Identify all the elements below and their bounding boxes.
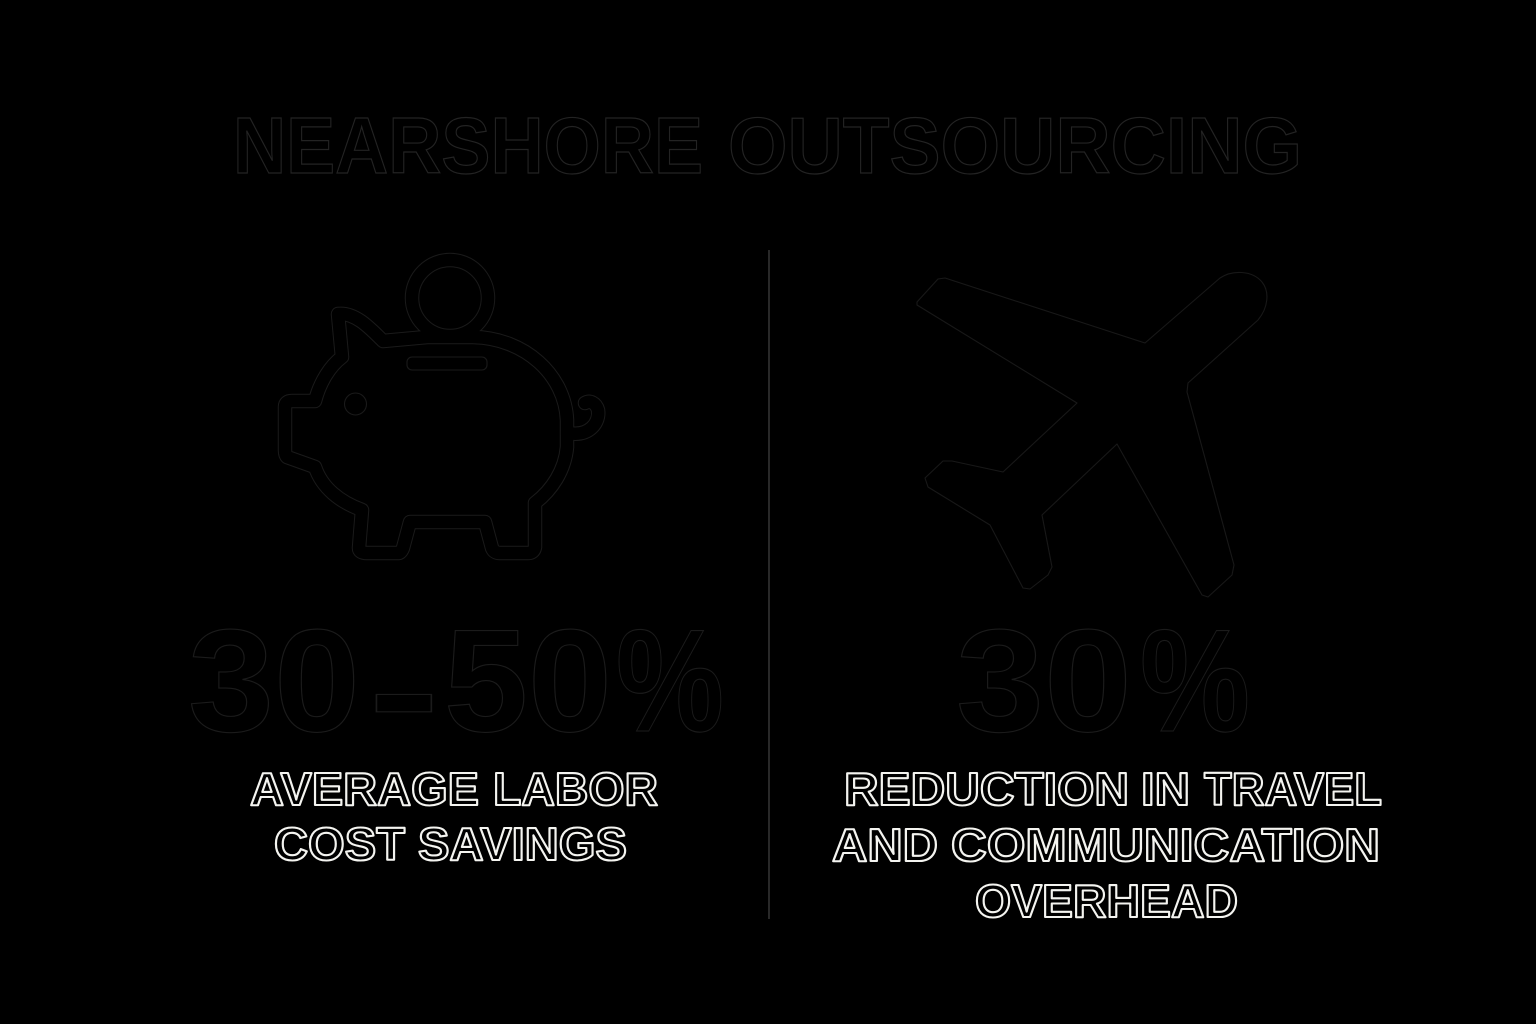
label: reduction in travel and communication overhead: AND: [832, 819, 938, 871]
label: average labor cost savings: SAVINGS: [418, 818, 627, 870]
title: NEARSHORE: [233, 101, 703, 190]
label: average labor cost savings: COST: [274, 818, 405, 870]
stat: 30%: 30: [956, 599, 1132, 762]
stat: 30-50%: %: [616, 599, 724, 762]
panel: labor cost savings: [188, 260, 724, 870]
divider: [768, 250, 770, 919]
stat: 30%: %: [1140, 599, 1250, 762]
label: average labor cost savings: [250, 763, 658, 870]
label: reduction in travel and communication overhead: [832, 763, 1382, 927]
label: average labor cost savings: LABOR: [493, 763, 658, 815]
icon: piggy bank with coin: [285, 260, 598, 553]
label: reduction in travel and communication overhead: REDUCTION: [844, 763, 1129, 815]
title: [233, 101, 1302, 190]
stat: 30-50%: -: [368, 609, 440, 772]
title: OUTSOURCING: [728, 101, 1302, 190]
icon: airplane: [917, 272, 1267, 597]
panel: travel and communication reduction: [832, 272, 1382, 927]
label: reduction in travel and communication overhead: COMMUNICATION: [951, 819, 1380, 871]
label: reduction in travel and communication overhead: OVERHEAD: [975, 875, 1238, 927]
stat: 30%: [956, 599, 1250, 762]
label: reduction in travel and communication overhead: IN: [1141, 763, 1190, 815]
stat: 30-50%: 50: [444, 599, 612, 762]
stat: 30-50%: [188, 599, 724, 772]
label: average labor cost savings: AVERAGE: [250, 763, 479, 815]
stat: 30-50%: 30: [188, 599, 360, 762]
label: reduction in travel and communication overhead: TRAVEL: [1204, 763, 1382, 815]
